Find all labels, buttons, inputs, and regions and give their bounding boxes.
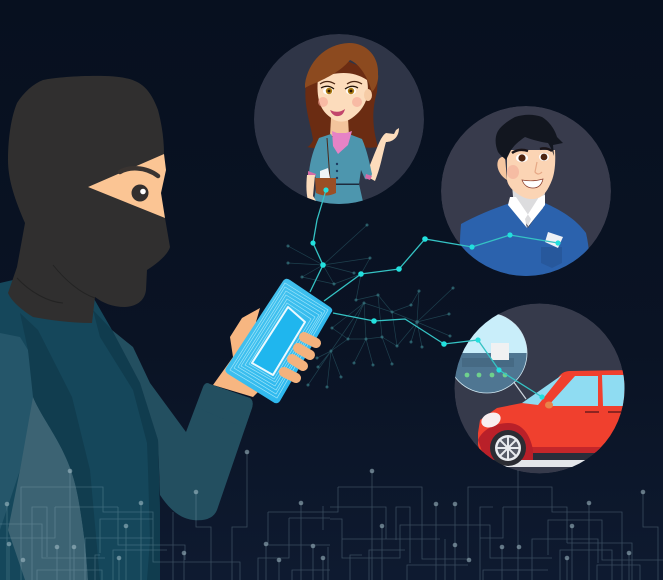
connection nodes	[310, 187, 561, 400]
hacker light fold	[8, 397, 88, 580]
faint network nodes	[286, 224, 454, 388]
hacker eye	[132, 184, 148, 202]
hacker left jacket panel	[0, 333, 35, 530]
woman cuff	[308, 171, 372, 180]
man collar	[508, 195, 545, 228]
woman buttons	[336, 163, 338, 179]
hacker arm	[112, 330, 253, 520]
side windows	[548, 375, 630, 406]
woman face	[318, 73, 368, 122]
phone rings	[230, 283, 328, 398]
door handles	[585, 411, 622, 413]
woman dress	[309, 134, 372, 206]
hand palm	[213, 308, 272, 397]
woman eyes	[321, 86, 358, 94]
woman collar	[332, 131, 352, 154]
wheel	[490, 430, 526, 466]
man eyes	[516, 153, 549, 162]
fingers	[284, 337, 316, 378]
circuit nodes	[5, 450, 645, 562]
hacker hood	[8, 76, 170, 323]
woman belt	[336, 184, 359, 185]
circle: car	[454, 304, 624, 474]
car lower trim	[532, 447, 601, 453]
hacker eyebrow	[120, 168, 158, 176]
figure: masked hacker	[0, 76, 253, 580]
connection lines	[310, 190, 558, 397]
man cheek	[507, 165, 519, 179]
man smile	[522, 179, 543, 188]
magnifier stem	[513, 381, 526, 399]
man nose	[535, 162, 542, 174]
phone body	[225, 279, 332, 403]
circle: man	[441, 106, 611, 285]
man neck	[512, 190, 545, 226]
man hair	[496, 115, 563, 160]
woman eyebrows	[320, 82, 362, 84]
road stripe	[497, 460, 587, 467]
man face	[507, 150, 555, 199]
hacker inner band	[93, 310, 160, 580]
headlight	[479, 410, 503, 430]
car shadow	[533, 453, 594, 460]
car body	[478, 370, 630, 452]
man shirt	[460, 203, 588, 276]
windshield	[522, 375, 562, 405]
woman back hair	[305, 60, 378, 148]
woman ear	[364, 89, 372, 101]
woman mouth	[330, 109, 345, 116]
woman bag	[315, 138, 336, 196]
magnifier lens	[440, 305, 530, 403]
man eyebrows	[512, 148, 552, 153]
hood creases	[17, 265, 95, 303]
hacker torso	[0, 280, 160, 580]
woman cheeks	[318, 97, 362, 107]
circuit lines	[0, 452, 663, 580]
wheel arch	[478, 423, 533, 460]
woman neck	[330, 118, 349, 136]
man badge	[545, 232, 563, 248]
magnifier rim	[447, 313, 527, 393]
woman hand at bag	[306, 175, 316, 201]
circle: woman	[254, 34, 424, 206]
phone	[225, 279, 332, 403]
hacker cuff	[198, 383, 253, 428]
hacker dark band	[20, 313, 100, 580]
phone inner panel	[252, 307, 305, 375]
woman right arm	[370, 128, 399, 181]
man ear	[497, 157, 507, 180]
man pocket	[541, 247, 562, 268]
hacker skin	[88, 154, 166, 218]
car mirror	[545, 402, 553, 408]
woman fringe hair	[305, 43, 378, 92]
faint network mesh	[288, 225, 453, 387]
